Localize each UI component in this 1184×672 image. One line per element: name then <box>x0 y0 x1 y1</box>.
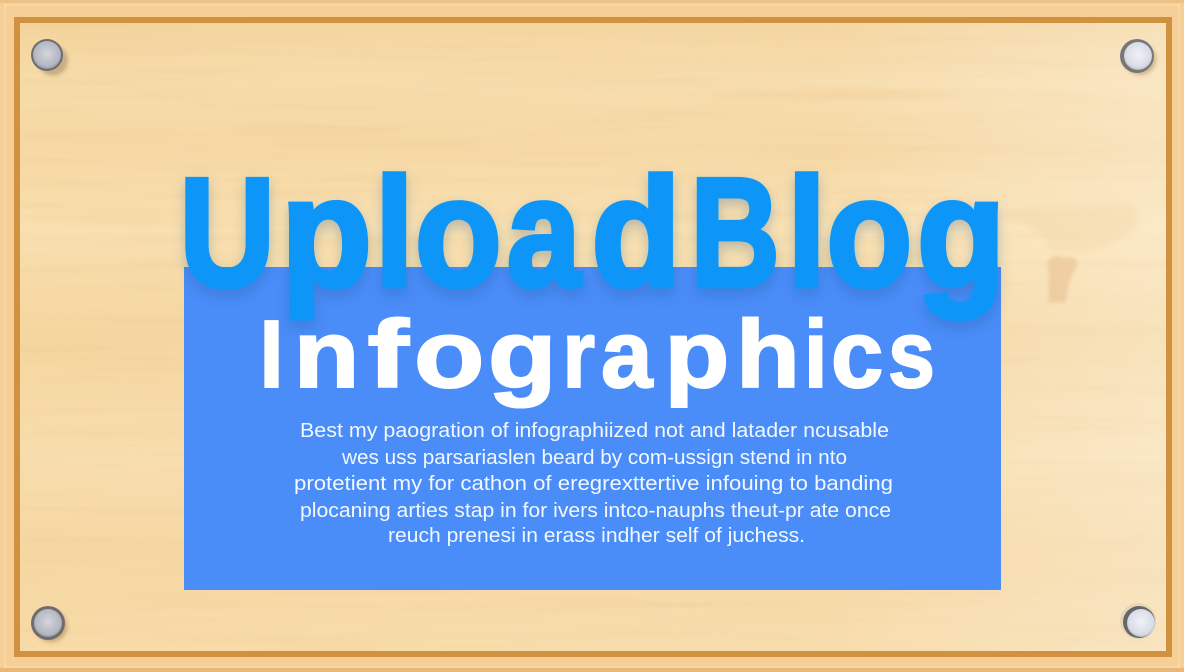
rivet: top right <box>1120 39 1156 75</box>
subtitle: Infographics: g <box>488 301 557 408</box>
subtitle: Infographics: a <box>601 300 654 407</box>
body text: Best my paogration of infographiized not and latader ncusable <box>300 420 889 442</box>
title: UploadBlog: o <box>826 147 912 320</box>
subtitle: Infographics: r <box>562 302 595 408</box>
title: UploadBlog: g <box>917 145 1005 319</box>
subtitle: Infographics: c <box>831 301 883 408</box>
title: UploadBlog: a <box>507 146 582 319</box>
rivet: bottom left <box>31 606 67 642</box>
panel: blue text card <box>184 267 1001 590</box>
title: UploadBlog: d <box>592 146 681 319</box>
title: UploadBlog: l <box>788 147 826 320</box>
subtitle: Infographics: h <box>736 301 800 408</box>
title: UploadBlog: U <box>180 146 275 319</box>
subtitle: Infographics <box>260 300 935 408</box>
subtitle: Infographics: o <box>414 301 484 408</box>
title: UploadBlog: p <box>281 146 372 320</box>
rivet: bottom right <box>1120 603 1156 639</box>
title: UploadBlog: o <box>415 147 502 319</box>
subtitle: Infographics: f <box>368 301 410 408</box>
body text: reuch prenesi in erass indher self of juchess. <box>388 525 805 547</box>
title: UploadBlog: B <box>690 145 780 319</box>
subtitle: Infographics: s <box>888 301 935 408</box>
body text: plocaning arties stap in for ivers intco-nauphs theut-pr ate once <box>300 500 891 522</box>
subtitle: Infographics: i <box>804 301 827 408</box>
body text: protetient my for cathon of eregrexttertive infouing to banding <box>294 473 893 495</box>
title: UploadBlog <box>180 145 1005 320</box>
body text <box>294 420 893 547</box>
subtitle: Infographics: p <box>664 301 729 408</box>
body text: wes uss parsariaslen beard by com-ussign stend in nto <box>341 447 847 469</box>
subtitle: Infographics: n <box>294 300 359 408</box>
subtitle: Infographics: I <box>260 301 284 408</box>
rivet: top left <box>31 39 68 76</box>
title: UploadBlog: l <box>375 147 414 320</box>
